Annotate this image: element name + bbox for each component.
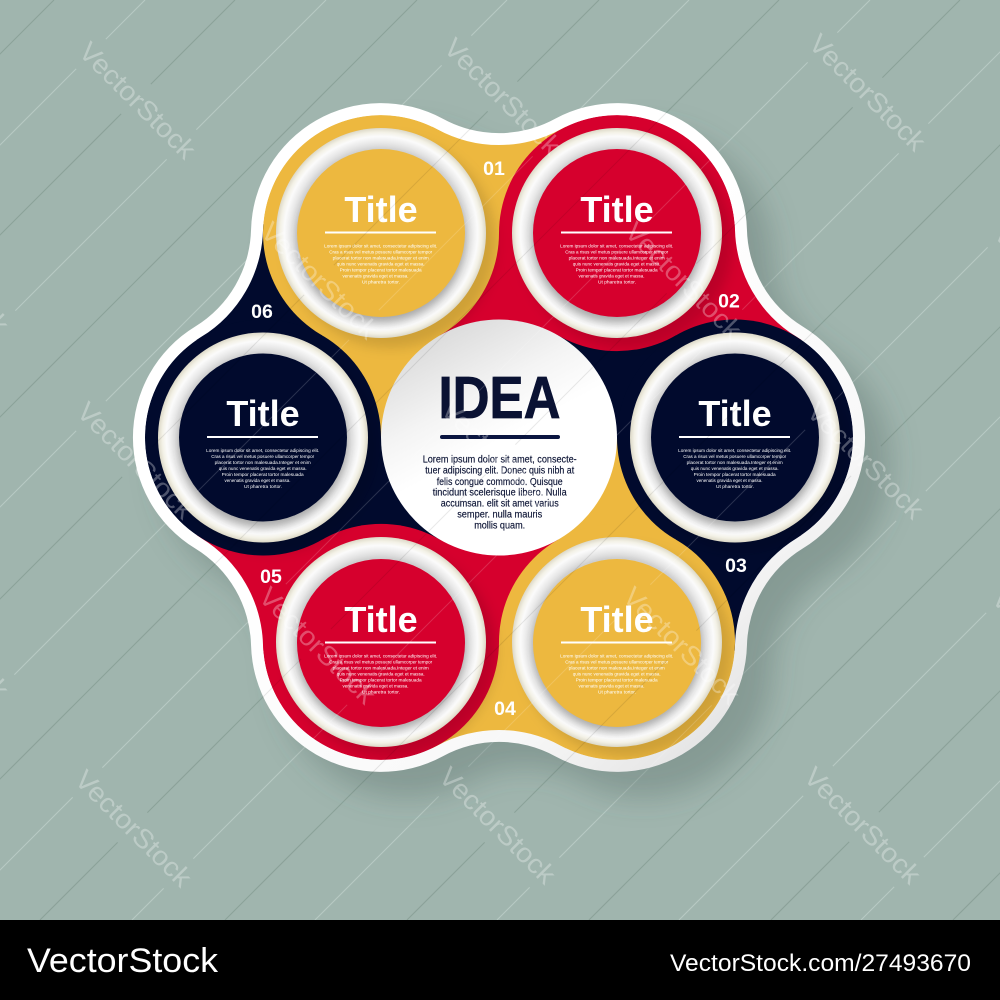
step 03 circle: Proin tempor placerat tortor malesuada: [694, 472, 776, 477]
step 04 circle: Cras a risus vel metus posuere ullamcorper tempor: [565, 660, 669, 665]
watermarks: VectorStock: [619, 216, 748, 345]
step 01 circle: Cras a risus vel metus posuere ullamcorper tempor: [329, 250, 433, 255]
step 01 circle: Title: [344, 189, 418, 230]
step 04 circle: Proin tempor placerat tortor malesuada: [576, 678, 658, 683]
step 02 circle: Lorem ipsum dolor sit amet, consectetur adipiscing elit.: [560, 244, 673, 249]
step 01 circle: Proin tempor placerat tortor malesuada: [340, 268, 422, 273]
watermarks: VectorStock: [73, 36, 202, 165]
step 02 circle: quis nunc venenatis gravida eget et massa.: [573, 262, 661, 267]
step 05 circle: Cras a risus vel metus posuere ullamcorper tempor: [329, 660, 433, 665]
idea heading: IDEA: [438, 365, 560, 431]
step numbers: [251, 158, 747, 720]
step 05 circle: Proin tempor placerat tortor malesuada: [340, 678, 422, 683]
step 02 circle: venenatis gravida eget et massa.: [578, 273, 644, 278]
idea underline: [442, 435, 558, 439]
step numbers: 02: [718, 290, 740, 312]
step 05 circle: placerat tortor non malesuada.Integer et enim: [333, 666, 429, 671]
idea body text: mollis quam.: [474, 521, 525, 532]
step 05 circle: [276, 537, 486, 747]
step 03 circle: Lorem ipsum dolor sit amet, consectetur adipiscing elit.: [678, 448, 791, 453]
blob drop shadow: [159, 129, 891, 798]
step numbers: 06: [251, 301, 273, 323]
step 01 circle: Ut pharetra tortor.: [362, 279, 400, 284]
step 02 circle: [512, 128, 722, 338]
step 01 circle: venenatis gravida eget et massa.: [342, 273, 408, 278]
idea body text: [423, 455, 577, 532]
watermarks: VectorStock: [71, 396, 200, 525]
step 03 circle: Title: [698, 393, 772, 434]
step 04 circle: Title: [580, 599, 654, 640]
white outer outline: [133, 103, 865, 772]
step 05 circle: Title: [344, 599, 418, 640]
watermarks: VectorStock: [617, 581, 746, 710]
step 06 circle: Proin tempor placerat tortor malesuada: [222, 472, 304, 477]
step 01 circle: Lorem ipsum dolor sit amet, consectetur adipiscing elit.: [324, 244, 437, 249]
idea body text: felis congue commodo. Quisque: [437, 477, 563, 488]
step numbers: 05: [260, 566, 282, 588]
watermarks: VectorStock: [438, 32, 567, 161]
watermarks: VectorStock: [435, 394, 564, 523]
step 03 circle: [630, 332, 840, 542]
step 03 circle: venenatis gravida eget et massa.: [696, 478, 762, 483]
step 03 circle: quis nunc venenatis gravida eget et massa.: [691, 466, 779, 471]
watermarks: VectorStock: [69, 764, 198, 893]
step 04 circle: Ut pharetra tortor.: [598, 689, 636, 694]
step 06 circle: Lorem ipsum dolor sit amet, consectetur adipiscing elit.: [206, 448, 319, 453]
step 05 circle: Ut pharetra tortor.: [362, 689, 400, 694]
step 01 circle: placerat tortor non malesuada.Integer et enim: [333, 256, 429, 261]
idea body text: tuer adipiscing elit. Donec quis nibh at: [425, 466, 574, 477]
step numbers: 01: [483, 158, 505, 180]
idea body text: Lorem ipsum dolor sit amet, consecte-: [423, 455, 577, 466]
idea body text: semper. nulla mauris: [457, 510, 542, 521]
watermarks: VectorStock: [801, 396, 930, 525]
step 04 circle: quis nunc venenatis gravida eget et massa.: [573, 672, 661, 677]
step 02 circle: Cras a risus vel metus posuere ullamcorper tempor: [565, 250, 669, 255]
step 06 circle: placerat tortor non malesuada.Integer et enim: [215, 460, 311, 465]
step 01 circle: [276, 128, 486, 338]
step 05 circle: venenatis gravida eget et massa.: [342, 683, 408, 688]
step 01 circle: quis nunc venenatis gravida eget et massa.: [337, 262, 425, 267]
watermarks: VectorStock: [798, 761, 927, 890]
step 06 circle: venenatis gravida eget et massa.: [224, 478, 290, 483]
step 03 circle: Cras a risus vel metus posuere ullamcorper tempor: [683, 454, 787, 459]
step 06 circle: quis nunc venenatis gravida eget et massa.: [219, 466, 307, 471]
image url: VectorStock.com/27493670: [670, 950, 971, 977]
idea body text: accumsan. elit sit amet varius: [441, 499, 559, 510]
step 06 circle: Ut pharetra tortor.: [244, 484, 282, 489]
watermarks: VectorStock: [255, 216, 384, 345]
step 06 circle: Cras a risus vel metus posuere ullamcorper tempor: [211, 454, 315, 459]
step 02 circle: placerat tortor non malesuada.Integer et enim: [569, 256, 665, 261]
step 05 circle: Lorem ipsum dolor sit amet, consectetur adipiscing elit.: [324, 654, 437, 659]
step 03 circle: placerat tortor non malesuada.Integer et enim: [687, 460, 783, 465]
step 06 circle: Title: [226, 393, 300, 434]
brand name: VectorStock: [27, 942, 219, 980]
idea body text: tincidunt scelerisque libero. Nulla: [433, 488, 567, 499]
step 04 circle: venenatis gravida eget et massa.: [578, 683, 644, 688]
central idea circle: [381, 320, 617, 556]
step 06 circle: [158, 332, 368, 542]
step 04 circle: placerat tortor non malesuada.Integer et enim: [569, 666, 665, 671]
step 04 circle: Lorem ipsum dolor sit amet, consectetur adipiscing elit.: [560, 654, 673, 659]
step 02 circle: Title: [580, 189, 654, 230]
watermarks: VectorStock: [803, 28, 932, 157]
step 02 circle: Proin tempor placerat tortor malesuada: [576, 268, 658, 273]
step 05 circle: quis nunc venenatis gravida eget et massa.: [337, 672, 425, 677]
step numbers: 04: [494, 698, 516, 720]
bottom credit bar: [0, 920, 1000, 1000]
watermarks: VectorStock: [433, 761, 562, 890]
step numbers: 03: [725, 555, 747, 577]
step 03 circle: Ut pharetra tortor.: [716, 484, 754, 489]
step 02 circle: Ut pharetra tortor.: [598, 279, 636, 284]
coloured pinwheel segments: [145, 115, 853, 760]
step 04 circle: [512, 537, 722, 747]
watermarks: VectorStock: [253, 581, 382, 710]
